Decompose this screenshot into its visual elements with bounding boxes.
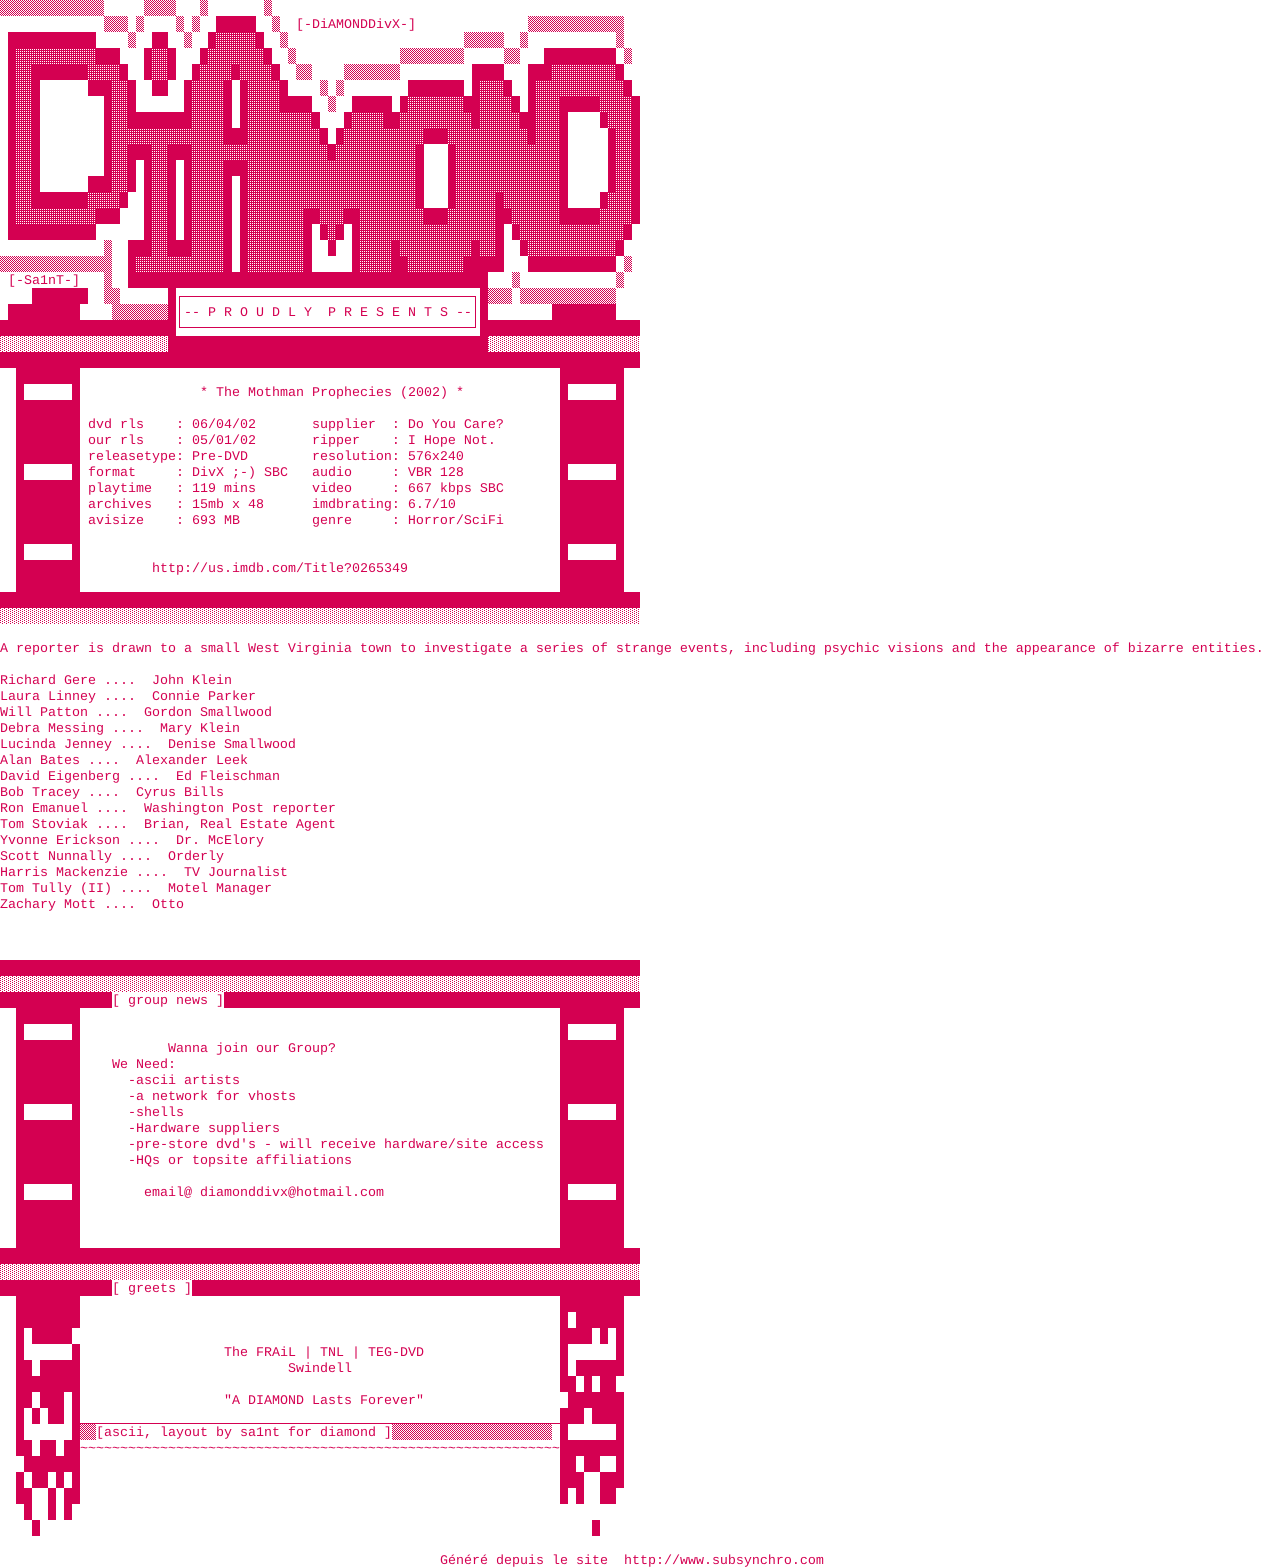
cast list: Tom Tully (II) .... Motel Manager [0, 882, 272, 897]
cast list: Scott Nunnally .... Orderly [0, 850, 224, 865]
recruitment text: -a network for vhosts [128, 1090, 296, 1105]
greets text: The FRAiL | TNL | TEG-DVD [224, 1346, 424, 1361]
release details: format : DivX ;-) SBC audio : VBR 128 [88, 466, 464, 481]
header bar [0, 1280, 640, 1296]
cast list: Tom Stoviak .... Brian, Real Estate Agent [0, 818, 336, 833]
pillar white bars [24, 384, 616, 560]
recruitment text: -Hardware suppliers [128, 1122, 280, 1137]
recruitment text: We Need: [112, 1058, 176, 1073]
left dripping pillar [16, 1296, 80, 1536]
release details: dvd rls : 06/04/02 supplier : Do You Care? [88, 418, 504, 433]
synopsis: A reporter is drawn to a small West Virginia town to investigate a series of strange events, including psychic visions and the appearance of bizarre entities. [0, 642, 1264, 657]
cast list: David Eigenberg .... Ed Fleischman [0, 770, 280, 785]
panel frame with pillars [0, 960, 640, 1264]
cast list: Bob Tracey .... Cyrus Bills [0, 786, 224, 801]
cast list: Debra Messing .... Mary Klein [0, 722, 240, 737]
release details: our rls : 05/01/02 ripper : I Hope Not. [88, 434, 496, 449]
greets text: Swindell [288, 1362, 352, 1377]
release details: avisize : 693 MB genre : Horror/SciFi [88, 514, 504, 529]
panel: greets [0, 1264, 640, 1536]
cast list: Laura Linney .... Connie Parker [0, 690, 256, 705]
recruitment text: -shells [128, 1106, 184, 1121]
movie title: * The Mothman Prophecies (2002) * [200, 386, 464, 401]
cast list: Lucinda Jenney .... Denise Smallwood [0, 738, 296, 753]
cast list: Will Patton .... Gordon Smallwood [0, 706, 272, 721]
right dripping pillar [560, 1296, 624, 1536]
credit bar: ~~~~~~~~~~~~~~~~~~~~~~~~~~~~~~~~~~~~~~~~~~~~~~~~~~~~~~~~~~~~ [80, 1442, 560, 1457]
pillar white bars [24, 1024, 616, 1200]
imdb link: http://us.imdb.com/Title?0265349 [152, 562, 408, 577]
section heading: [ greets ] [112, 1282, 192, 1297]
dither band under panel [0, 608, 640, 624]
recruitment text: Wanna join our Group? [168, 1042, 336, 1057]
recruitment text [112, 1042, 544, 1201]
logo dense dither fill [0, 32, 640, 272]
cast list: Zachary Mott .... Otto [0, 898, 184, 913]
cast list: Ron Emanuel .... Washington Post reporter [0, 802, 336, 817]
cast list: Yvonne Erickson .... Dr. McElory [0, 834, 264, 849]
credit bar: [ascii, layout by sa1nt for diamond ] [96, 1426, 392, 1441]
logo sparse dither band [0, 336, 640, 352]
section heading: [ group news ] [112, 994, 224, 1009]
logo checker shading [0, 0, 640, 320]
banner white box [176, 288, 480, 336]
recruitment text: -HQs or topsite affiliations [128, 1154, 352, 1169]
release details [88, 418, 504, 529]
cast list: Alan Bates .... Alexander Leek [0, 754, 248, 769]
dither band above panel [0, 1264, 640, 1280]
cast list: Richard Gere .... John Klein [0, 674, 232, 689]
panel frame with pillars [0, 368, 640, 608]
recruitment text: -ascii artists [128, 1074, 240, 1089]
panel: group news [0, 960, 640, 1264]
panel: release info [0, 368, 640, 624]
banner frame [179, 296, 476, 328]
banner: proudly presents [176, 288, 480, 336]
greets text: "A DIAMOND Lasts Forever" [224, 1394, 424, 1409]
dither band above panel [0, 976, 640, 992]
artist tag: [-Sa1nT-] [8, 274, 80, 289]
release details: archives : 15mb x 48 imdbrating: 6.7/10 [88, 498, 456, 513]
banner text: -- P R O U D L Y P R E S E N T S -- [184, 306, 472, 321]
cast list [0, 674, 336, 913]
recruitment text: email@ diamonddivx@hotmail.com [144, 1186, 384, 1201]
cast list: Harris Mackenzie .... TV Journalist [0, 866, 288, 881]
group tag: [-DiAMONDDivX-] [296, 18, 416, 33]
recruitment text: -pre-store dvd's - will receive hardware/site access [128, 1138, 544, 1153]
credit bar [80, 1423, 560, 1457]
release details: releasetype: Pre-DVD resolution: 576x240 [88, 450, 464, 465]
ascii logo: DIAMOND block lettering [0, 0, 640, 368]
greets text [224, 1346, 424, 1409]
logo solid blocks [0, 16, 640, 368]
release details: playtime : 119 mins video : 667 kbps SBC [88, 482, 504, 497]
